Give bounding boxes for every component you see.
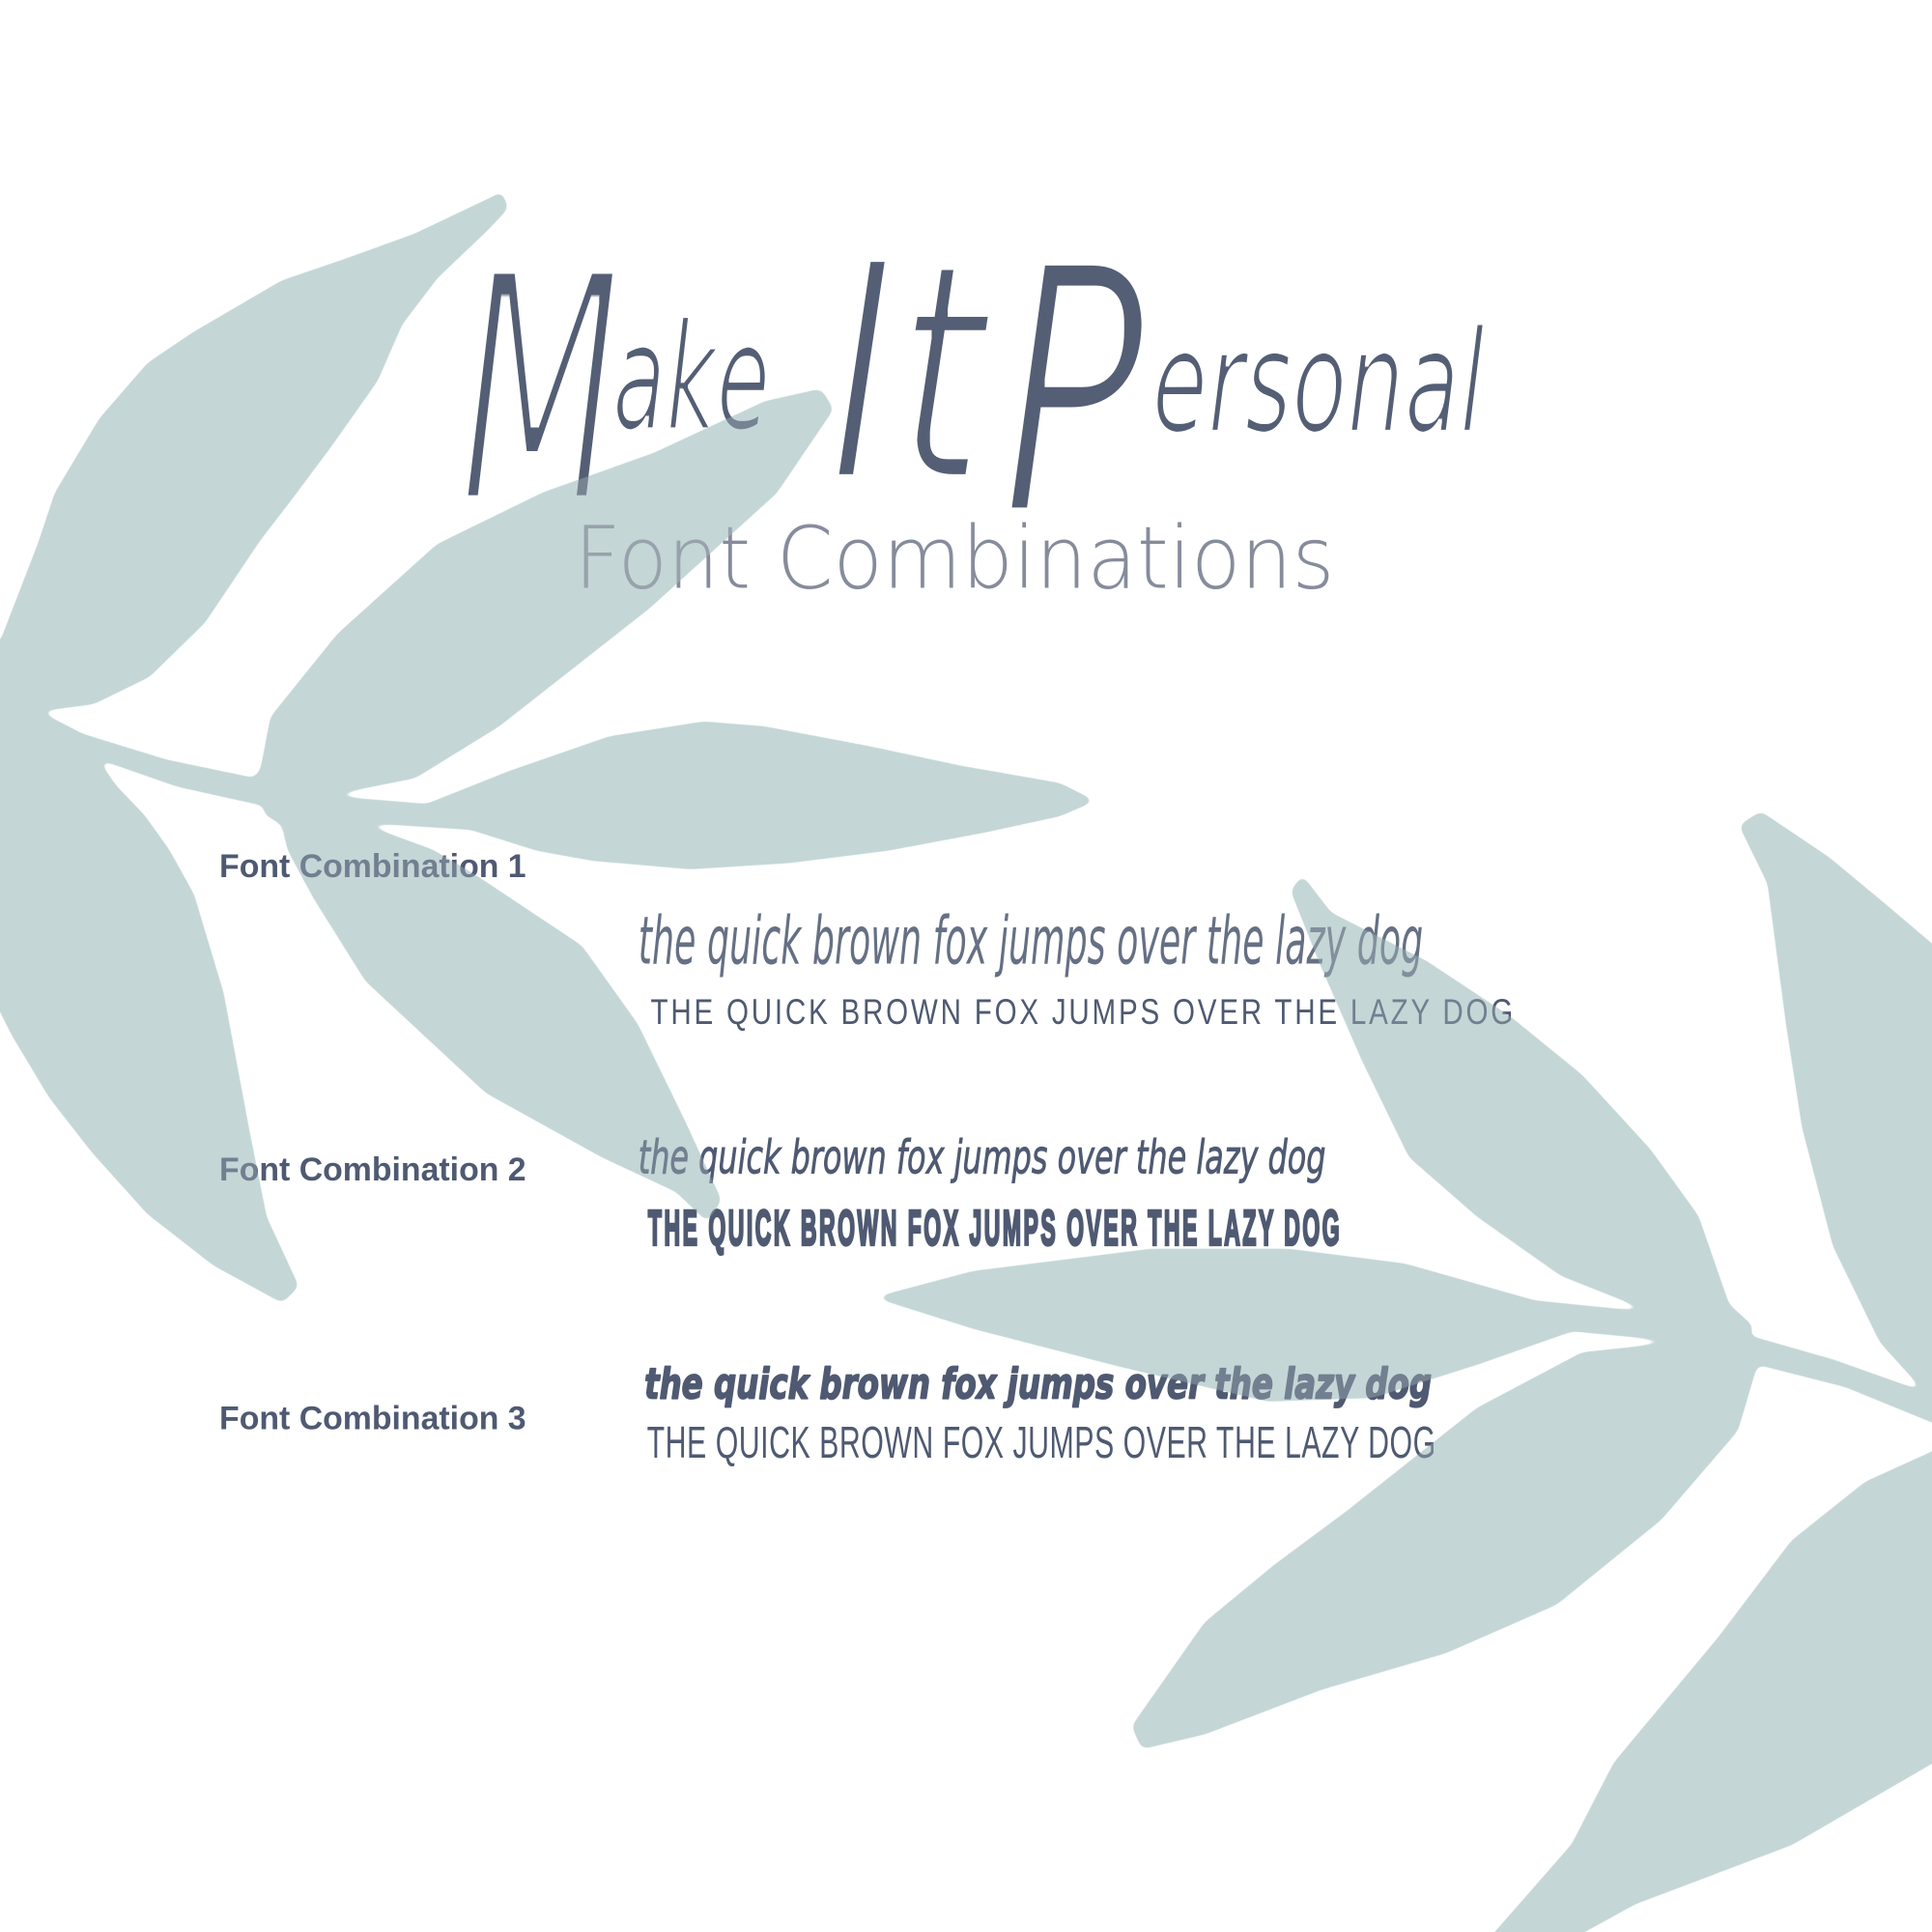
- label 3: Font Combination 3: [219, 1401, 526, 1437]
- label 1: Font Combination 1: [219, 848, 526, 885]
- label 2: Font Combination 2: [219, 1151, 526, 1188]
- font combination 2: [219, 1130, 1340, 1256]
- subtitle: Font Combinations: [574, 508, 1334, 609]
- title: ersonal: [1152, 299, 1485, 465]
- title: It: [828, 198, 996, 550]
- script sample 2: the quick brown fox jumps over the lazy dog: [639, 1130, 1325, 1184]
- caps sample 3: THE QUICK BROWN FOX JUMPS OVER THE LAZY DOG: [647, 1419, 1435, 1468]
- script sample 3: the quick brown fox jumps over the lazy dog: [644, 1361, 1432, 1409]
- font combination 3: [219, 1361, 1435, 1468]
- title: M: [458, 208, 622, 574]
- title: [458, 193, 1485, 592]
- title: P: [1001, 193, 1148, 592]
- caps sample 1: THE QUICK BROWN FOX JUMPS OVER THE LAZY DOG: [650, 993, 1513, 1033]
- title: ake: [612, 293, 770, 465]
- caps sample 2: THE QUICK BROWN FOX JUMPS OVER THE LAZY DOG: [648, 1201, 1340, 1256]
- font combination 1: [219, 848, 1513, 1033]
